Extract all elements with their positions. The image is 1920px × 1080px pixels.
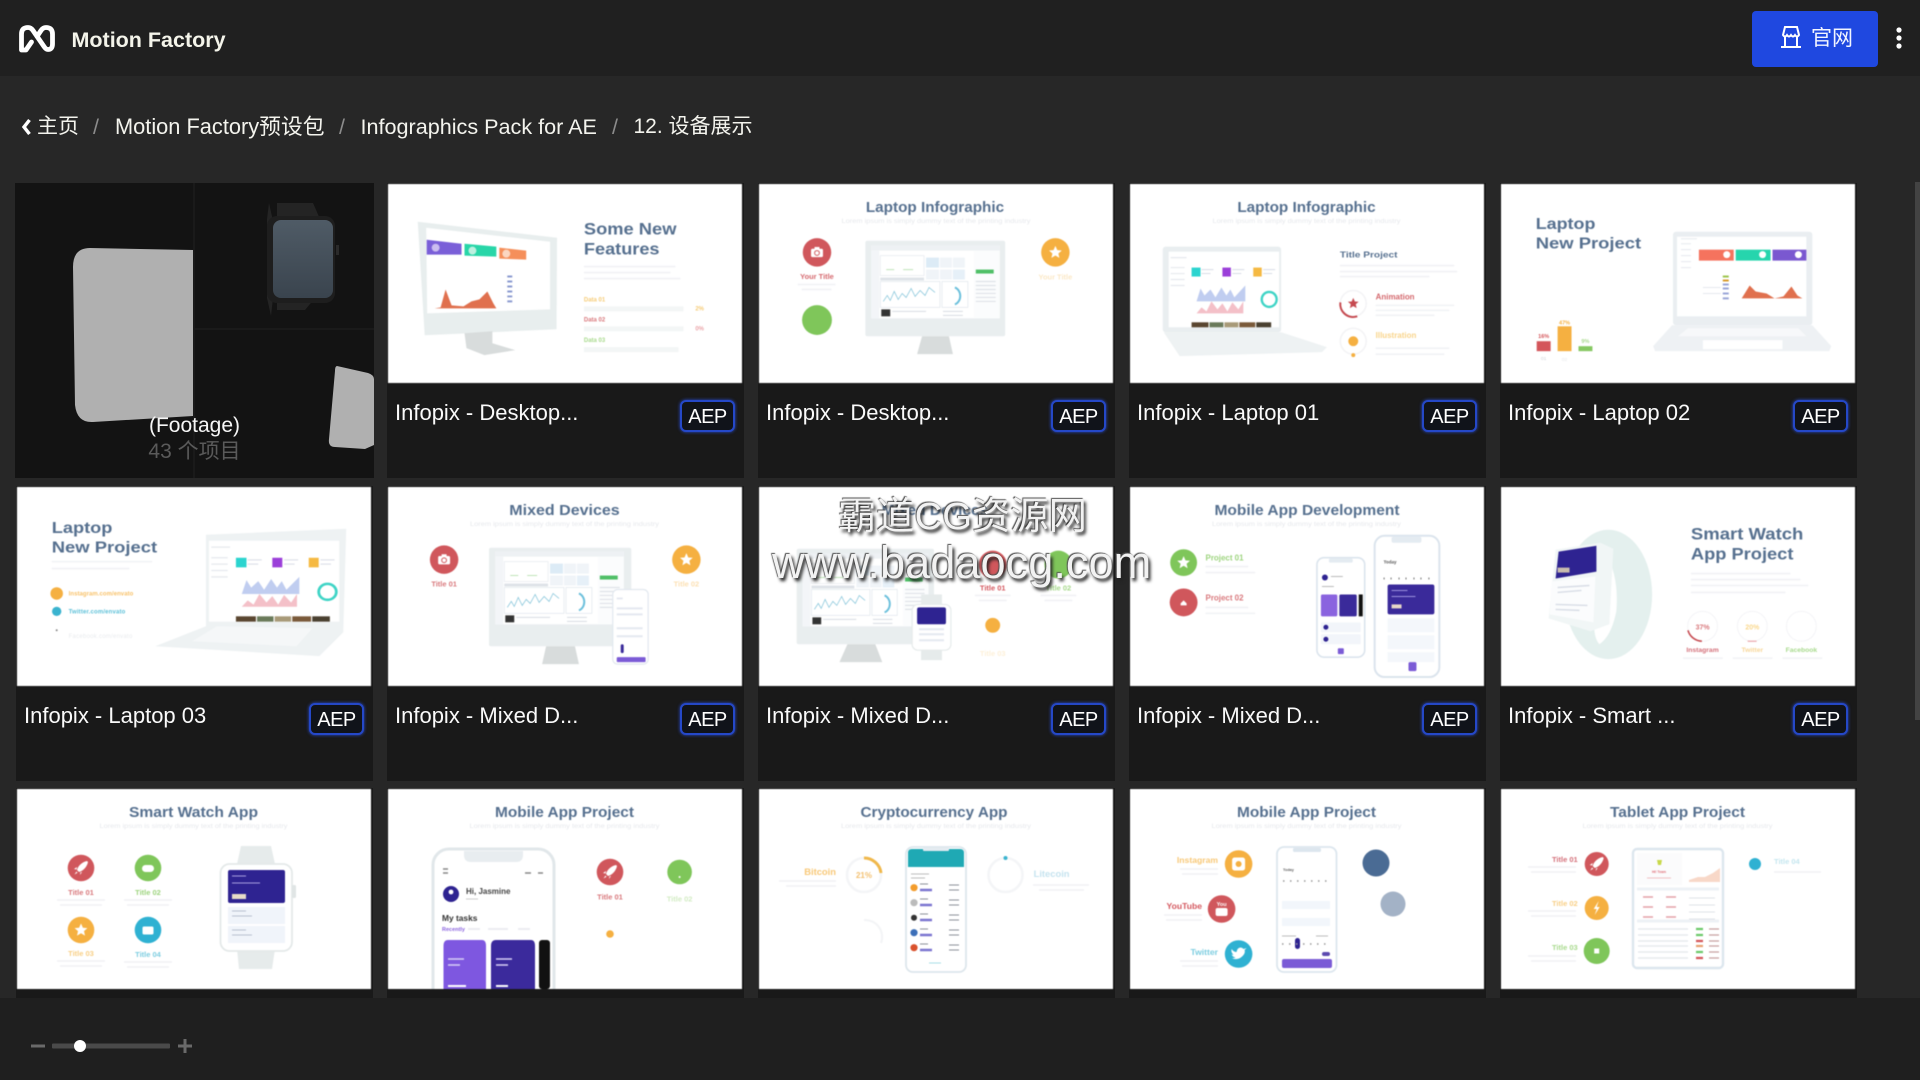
stat: Instagram	[1686, 611, 1719, 654]
card title: Infopix - Laptop 02	[1508, 400, 1690, 425]
faded gauge	[864, 920, 882, 943]
label: Title 04: Title 04	[1774, 857, 1801, 866]
button label: 官网	[1811, 27, 1853, 50]
icon: YouTube circle	[1208, 895, 1235, 923]
header bar	[0, 0, 1920, 76]
icon: back chevron	[22, 119, 31, 135]
icon: green circle	[1584, 938, 1610, 964]
thumbnail: Mobile App Development	[1130, 487, 1484, 686]
stat: Instagram: 37%	[1696, 624, 1710, 631]
icon: rocket circle	[68, 855, 94, 881]
label: Project 02: Project 02	[1206, 593, 1244, 602]
card: Infopix Laptop 01	[1129, 183, 1486, 478]
icon: laptop	[155, 529, 346, 656]
thumbnail: Mixed Devices	[388, 487, 742, 686]
heading: Laptop	[52, 520, 113, 537]
format badge	[680, 703, 735, 735]
icon: star circle	[672, 545, 701, 574]
heading: Mobile App Project	[495, 805, 634, 821]
format badge: AEP	[1430, 406, 1469, 428]
item count: 43 个项目	[148, 440, 241, 463]
heading: Smart Watch App	[129, 805, 258, 821]
format badge: AEP	[1059, 709, 1098, 731]
icon: phone	[906, 847, 966, 972]
scrollbar	[1915, 182, 1920, 720]
bar chart: 16%	[1538, 334, 1549, 340]
subtitle: Lorem ipsum is simply dummy text of the printing industry	[1212, 823, 1402, 830]
thumbnail: Cryptocurrency App	[759, 789, 1113, 989]
stat: Instagram: Instagram	[1686, 647, 1719, 654]
icon: star circle	[68, 917, 94, 943]
card: Infopix Laptop 03	[16, 486, 373, 781]
card: Infopix Mixed Devices 03	[1129, 486, 1486, 781]
label: faded title: Your Title	[1039, 273, 1072, 282]
icon: YouTube circle: You	[1217, 902, 1227, 908]
gauge: Bitcoin: 21%	[856, 871, 872, 880]
icon: phone	[1277, 847, 1336, 972]
stat: Twitter	[1737, 611, 1767, 654]
icon: bolt circle	[1585, 896, 1609, 920]
icon: phone: My tasks	[442, 913, 478, 923]
card: Infopix Desktop 02	[758, 183, 1115, 478]
subtitle: Lorem ipsum is simply dummy text of the printing industry	[100, 823, 288, 830]
gauge: Bitcoin	[847, 858, 881, 892]
label: Twitter: Twitter	[1190, 947, 1219, 957]
card title: Infopix - Mixed D...	[766, 703, 949, 728]
heading: Mixed Devices	[882, 503, 988, 519]
label: Project 01: Project 01	[1206, 554, 1244, 563]
label: Title 01: Title 01	[1552, 855, 1578, 864]
format badge: AEP	[1801, 406, 1840, 428]
format badge	[1793, 400, 1848, 432]
icon: green circle	[1044, 551, 1072, 579]
breadcrumb: presets: Motion Factory预设包	[115, 114, 325, 139]
bar chart: 9%	[1581, 339, 1590, 345]
folder name: (Footage)	[149, 414, 240, 437]
icon: navy circle	[1362, 850, 1390, 876]
icon: star progress	[1340, 290, 1366, 317]
icon: illustration progress	[1340, 328, 1366, 357]
icon: small phone	[1317, 558, 1365, 657]
label: Animation: Animation	[1376, 292, 1415, 301]
format badge	[1051, 400, 1106, 432]
watermark: site name: 霸道CG资源网	[838, 495, 1087, 538]
format badge: AEP	[317, 709, 356, 731]
thumbnail: Smart Watch App	[17, 789, 371, 989]
subtitle: Lorem ipsum is simply dummy text of the printing industry	[470, 521, 660, 528]
icon: desktop monitor	[418, 222, 557, 355]
separator 2: /	[339, 115, 345, 139]
format badge: AEP	[688, 709, 727, 731]
label: Litecoin: Litecoin	[1034, 868, 1070, 879]
label: Instagram: Instagram	[1177, 855, 1218, 865]
icon: phone: Recently	[442, 927, 466, 933]
data bars: Data 03	[584, 338, 606, 344]
card: Infopix Mixed Devices 01	[387, 486, 744, 781]
footer toolbar	[0, 998, 1920, 1080]
thumbnail: Some New Features	[388, 184, 742, 383]
card: Mobile App Project social (partially hidden)	[1129, 788, 1486, 998]
breadcrumb: home: 主页	[37, 115, 79, 138]
breadcrumb: pack: Infographics Pack for AE	[360, 114, 597, 139]
thumbnail: Laptop New Project	[17, 487, 371, 686]
icon: red circle	[979, 551, 1007, 579]
label: Title Project: Title Project	[1340, 250, 1398, 260]
heading: Cryptocurrency App	[860, 805, 1008, 821]
heading: Mixed Devices	[509, 503, 620, 519]
label: Title 04: Title 04	[135, 950, 162, 959]
label: Title 02: Title 02	[667, 894, 692, 904]
thumbnail: Laptop Infographic	[759, 184, 1113, 383]
icon: desktop monitor	[865, 241, 1005, 354]
label: Title 02: Title 02	[135, 888, 161, 897]
icon: tablet: Hi! Team	[1652, 870, 1666, 874]
subtitle: Lorem ipsum is simply dummy text of the printing industry	[841, 823, 1032, 830]
icon: smartwatch	[220, 846, 296, 969]
format badge	[1793, 703, 1848, 735]
format badge	[1422, 400, 1477, 432]
icon: game circle	[135, 855, 161, 881]
subtitle: Lorem ipsum is simply dummy text of the printing industry	[1212, 218, 1401, 225]
card: Tablet App Project (partially hidden)	[1500, 788, 1857, 998]
heading: New Project	[1536, 236, 1642, 253]
label: Title 03: Title 03	[980, 649, 1005, 658]
label: Bitcoin: Bitcoin	[804, 866, 836, 877]
label: Title 01: Title 01	[980, 583, 1005, 592]
data bars	[584, 297, 705, 352]
thumbnail: Mobile App Project	[1130, 789, 1484, 989]
format badge: AEP	[688, 406, 727, 428]
breadcrumb: current folder: 12. 设备展示	[634, 115, 753, 138]
thumbnail: Tablet App Project	[1501, 789, 1855, 989]
thumbnail: Laptop New Project	[1501, 184, 1855, 383]
stat: Facebook	[1786, 611, 1817, 654]
icon: Motion Factory logo	[19, 25, 55, 52]
label: Illustration: Illustration	[1376, 331, 1416, 340]
format badge: AEP	[1059, 406, 1098, 428]
subtitle: Lorem ipsum is simply dummy text of the printing industry	[1582, 823, 1773, 830]
icon: camera circle	[803, 238, 831, 267]
card: Cryptocurrency App (partially hidden)	[758, 788, 1115, 998]
label: Title 03: Title 03	[68, 949, 94, 958]
icon: laptop	[1163, 247, 1327, 356]
site name: Motion Factory	[72, 28, 226, 52]
thumbnail: Laptop Infographic	[1130, 184, 1484, 383]
label: Title 01: Title 01	[431, 580, 457, 589]
format badge	[309, 703, 364, 735]
stat: Twitter: 20%	[1745, 624, 1759, 631]
format badge: AEP	[1430, 709, 1469, 731]
button: official site	[1752, 11, 1878, 67]
card: Infopix Mixed Devices 02	[758, 486, 1115, 781]
icon: yellow circle	[985, 618, 1000, 633]
heading	[52, 520, 158, 557]
thumbnail: Mixed Devices with watch	[759, 487, 1113, 686]
icon: smartwatch	[912, 594, 951, 660]
icon: large phone	[1375, 536, 1439, 677]
subtitle: Lorem ipsum is simply dummy text of the printing industry	[1212, 521, 1402, 528]
bar chart: 01	[1541, 356, 1547, 362]
breadcrumb navigation	[22, 114, 753, 139]
icon: phone: Today	[1283, 868, 1295, 872]
icon: camera circle	[135, 917, 161, 943]
separator 1: /	[93, 115, 99, 139]
card: Mobile App Project (partially hidden)	[387, 788, 744, 998]
card title: Infopix - Mixed D...	[1137, 703, 1320, 728]
footage preview	[73, 183, 374, 478]
bar chart: 47%	[1559, 320, 1570, 326]
heading: New Project	[52, 540, 158, 557]
card title: Infopix - Laptop 01	[1137, 400, 1319, 425]
icon: blue circle	[1749, 858, 1761, 870]
icon: star circle	[1041, 238, 1070, 267]
icon: camera circle	[430, 545, 458, 574]
heading: Smart Watch	[1691, 525, 1803, 544]
icon: star circle	[1170, 549, 1197, 576]
separator 3: /	[612, 115, 618, 139]
stat: Twitter: Twitter	[1742, 647, 1764, 654]
label: Title 01: Title 01	[68, 888, 94, 897]
icon: green circle	[802, 305, 832, 335]
card title: Infopix - Laptop 03	[24, 703, 206, 728]
icon: smartwatch	[1549, 530, 1652, 659]
bar chart	[1537, 320, 1592, 363]
gauge: Litecoin	[988, 856, 1022, 892]
icon: rocket circle	[597, 859, 623, 885]
heading	[1691, 525, 1803, 564]
social links: Facebook.com/envato	[69, 634, 133, 640]
heading: Tablet App Project	[1610, 805, 1745, 821]
icon: phone: Hi, Jasmine	[466, 887, 511, 896]
heading: Mobile App Project	[1237, 805, 1376, 821]
thumbnail: Mobile App Project	[388, 789, 742, 989]
card title: Infopix - Desktop...	[766, 400, 949, 425]
icon: rocket circle	[1585, 852, 1609, 876]
label: Title 01: Title 01	[597, 892, 623, 902]
data bars: 0%	[695, 326, 705, 332]
card title: Infopix - Mixed D...	[395, 703, 578, 728]
heading: Laptop	[1536, 216, 1596, 233]
format badge: AEP	[1801, 709, 1840, 731]
icon: Instagram circle	[1225, 850, 1252, 878]
heading: Features	[584, 241, 660, 259]
thumbnail: Smart Watch App Project	[1501, 487, 1855, 686]
heading	[1536, 216, 1642, 253]
heading: Some New	[584, 221, 677, 239]
label: Your Title: Your Title	[800, 272, 834, 281]
icon: grey circle	[1380, 892, 1406, 916]
icon: storefront	[1781, 26, 1801, 48]
stat: Facebook: Facebook	[1786, 647, 1817, 654]
icon: phone	[613, 589, 648, 664]
data bars: Data 01	[584, 297, 606, 303]
heading: Mobile App Development	[1214, 503, 1400, 519]
heading: Laptop Infographic	[866, 200, 1004, 216]
card title: Infopix - Desktop...	[395, 400, 578, 425]
social links: Twitter.com/envato	[69, 609, 126, 615]
label: Title 02: Title 02	[1046, 583, 1071, 592]
card: Smart Watch App (partially hidden)	[16, 788, 373, 998]
icon: tablet	[1633, 849, 1723, 968]
data bars: 2%	[695, 306, 705, 312]
icon: large phone: Today	[1384, 560, 1397, 565]
format badge	[1051, 703, 1106, 735]
card: footage folder	[15, 183, 374, 478]
social links: Instagram.com/envato	[69, 591, 134, 597]
label: Title 03: Title 03	[1552, 943, 1578, 952]
format badge	[1422, 703, 1477, 735]
subtitle: Lorem ipsum is simply dummy text of the printing industry	[841, 218, 1031, 225]
card title: Infopix - Smart ...	[1508, 703, 1676, 728]
icon: desktop monitor	[797, 549, 934, 662]
icon: yellow dot	[606, 930, 614, 938]
label: YouTube: YouTube	[1167, 901, 1202, 911]
data bars: Data 02	[584, 317, 606, 323]
bar chart: 02	[1562, 357, 1568, 363]
label: Title 02: Title 02	[1552, 899, 1578, 908]
card: Infopix Smart Watch	[1500, 486, 1857, 781]
heading	[584, 221, 677, 259]
subtitle: Lorem ipsum is simply dummy text of the printing industry	[470, 823, 660, 830]
watermark: site url: www.badaocg.com	[772, 537, 1151, 588]
heading: App Project	[1691, 545, 1794, 564]
format badge	[680, 400, 735, 432]
icon: desktop monitor	[489, 548, 631, 664]
heading: Laptop Infographic	[1237, 200, 1376, 216]
icon: Twitter circle	[1225, 940, 1252, 968]
icon: phone	[433, 849, 554, 1019]
card: Infopix Desktop 01	[387, 183, 744, 478]
icon: green circle	[667, 860, 692, 884]
card: Infopix Laptop 02	[1500, 183, 1857, 478]
icon: more menu	[1896, 27, 1902, 49]
label: Title 02: Title 02	[674, 580, 699, 589]
social links	[50, 587, 134, 640]
icon: laptop	[1653, 232, 1831, 351]
zoom slider	[31, 1039, 192, 1053]
icon: red circle	[1170, 588, 1198, 616]
